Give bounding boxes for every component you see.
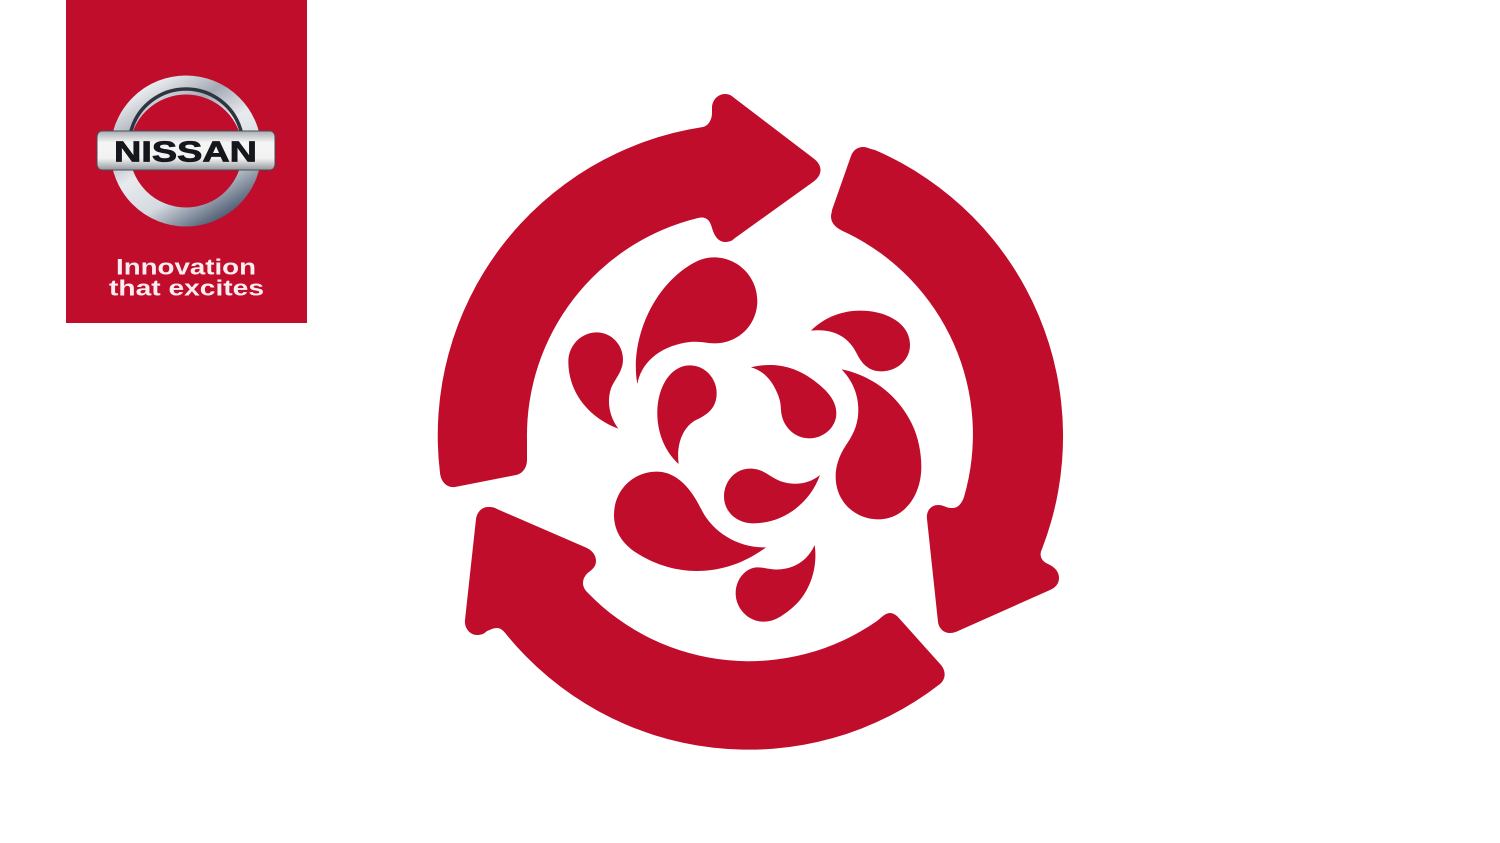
arrow: top left arc: [438, 94, 820, 487]
logo background: [66, 0, 307, 323]
droplet: centre left: [657, 365, 717, 464]
droplet: top right: [811, 311, 910, 371]
droplet swirl: [568, 257, 921, 622]
tagline: [109, 254, 264, 300]
emblem bar: [97, 131, 275, 170]
emblem wordmark: NISSAN: [114, 136, 257, 168]
droplet: small left: [568, 332, 623, 429]
droplet: bottom: [736, 545, 815, 622]
droplet: centre bottom: [724, 469, 820, 523]
emblem inner shadow: [131, 89, 241, 131]
tagline line 1: Innovation: [116, 254, 256, 280]
arrow: right arc: [831, 147, 1063, 633]
droplet: large top: [636, 257, 757, 384]
tagline line 2: that excites: [109, 276, 264, 300]
droplet: large lower left: [614, 472, 766, 571]
droplet: large right: [836, 369, 921, 519]
arrow: bottom arc: [465, 507, 945, 750]
emblem ring: [120, 85, 252, 217]
panel: Nissan logo block: [66, 0, 307, 323]
recycling cycle diagram: [438, 94, 1063, 750]
icon: Nissan emblem: [97, 85, 275, 217]
droplet: centre top: [751, 365, 836, 438]
